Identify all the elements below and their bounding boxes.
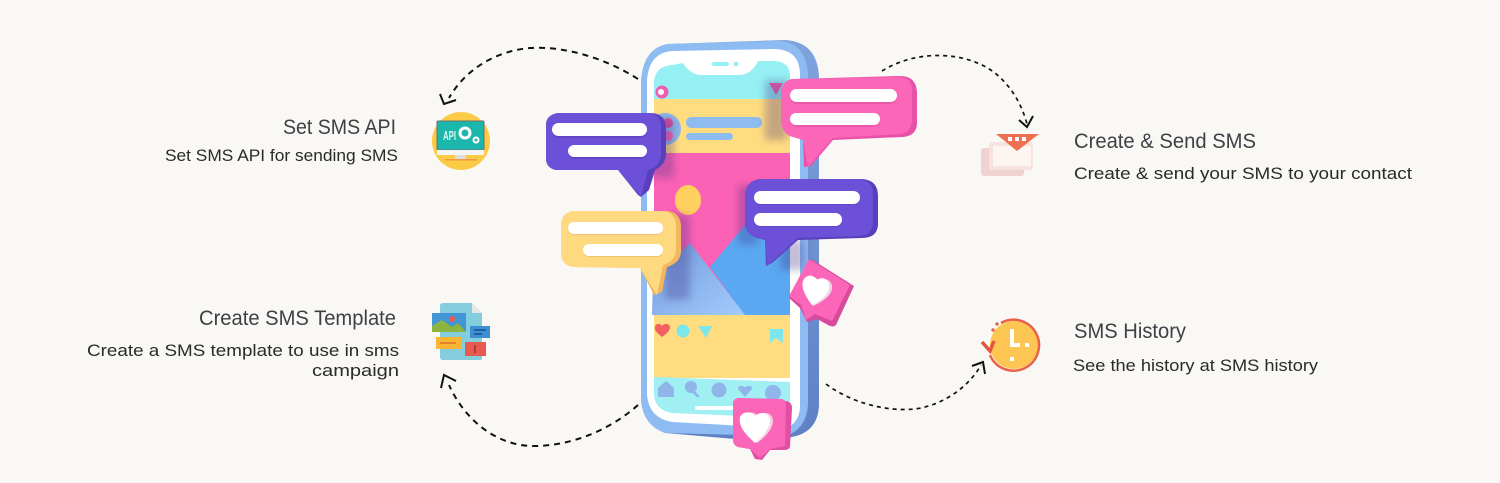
heart badge: tilted (789, 259, 854, 326)
heading: Set SMS API (283, 116, 396, 139)
icon: clock (982, 320, 1039, 371)
step: SMS History (982, 320, 1319, 375)
step: Create & Send SMS (981, 130, 1412, 183)
speech bubble: yellow (561, 211, 681, 295)
screen (652, 61, 790, 418)
speech bubble: pink top (781, 76, 917, 167)
heading: Create & Send SMS (1074, 130, 1256, 153)
phone body (641, 40, 819, 442)
description: Create a SMS template to use in sms (87, 341, 399, 360)
heart badge: bottom (733, 398, 792, 460)
icon: template document (432, 303, 490, 360)
profile row (649, 113, 762, 145)
speech bubble: purple left (546, 113, 666, 197)
arrow: phone to Create & Send SMS (882, 55, 1033, 127)
navigation icons (658, 381, 781, 410)
icon: envelope (981, 134, 1039, 176)
description: Create & send your SMS to your contact (1074, 164, 1412, 183)
white bezel (647, 49, 800, 428)
shadows of bubbles on phone (650, 80, 805, 300)
icon: API monitor: API (443, 128, 456, 143)
mountains (710, 225, 790, 316)
heading: Create SMS Template (199, 307, 396, 330)
step: Set SMS API (165, 112, 490, 170)
description: Set SMS API for sending SMS (165, 146, 398, 165)
arrow: phone to SMS History (826, 362, 985, 410)
top screen icons (656, 83, 783, 98)
phone illustration (641, 40, 819, 442)
step: Create SMS Template: campaign (312, 361, 399, 380)
arrow: phone to Create SMS Template (441, 375, 638, 446)
arrow: phone to Set SMS API (440, 48, 638, 104)
description: See the history at SMS history (1073, 356, 1319, 375)
speech bubble: purple right (745, 179, 878, 266)
step: Create SMS Template (87, 303, 490, 380)
action icons (655, 324, 783, 343)
heading: SMS History (1074, 320, 1186, 343)
icon: API monitor (432, 112, 490, 170)
notch sensors (712, 62, 729, 66)
